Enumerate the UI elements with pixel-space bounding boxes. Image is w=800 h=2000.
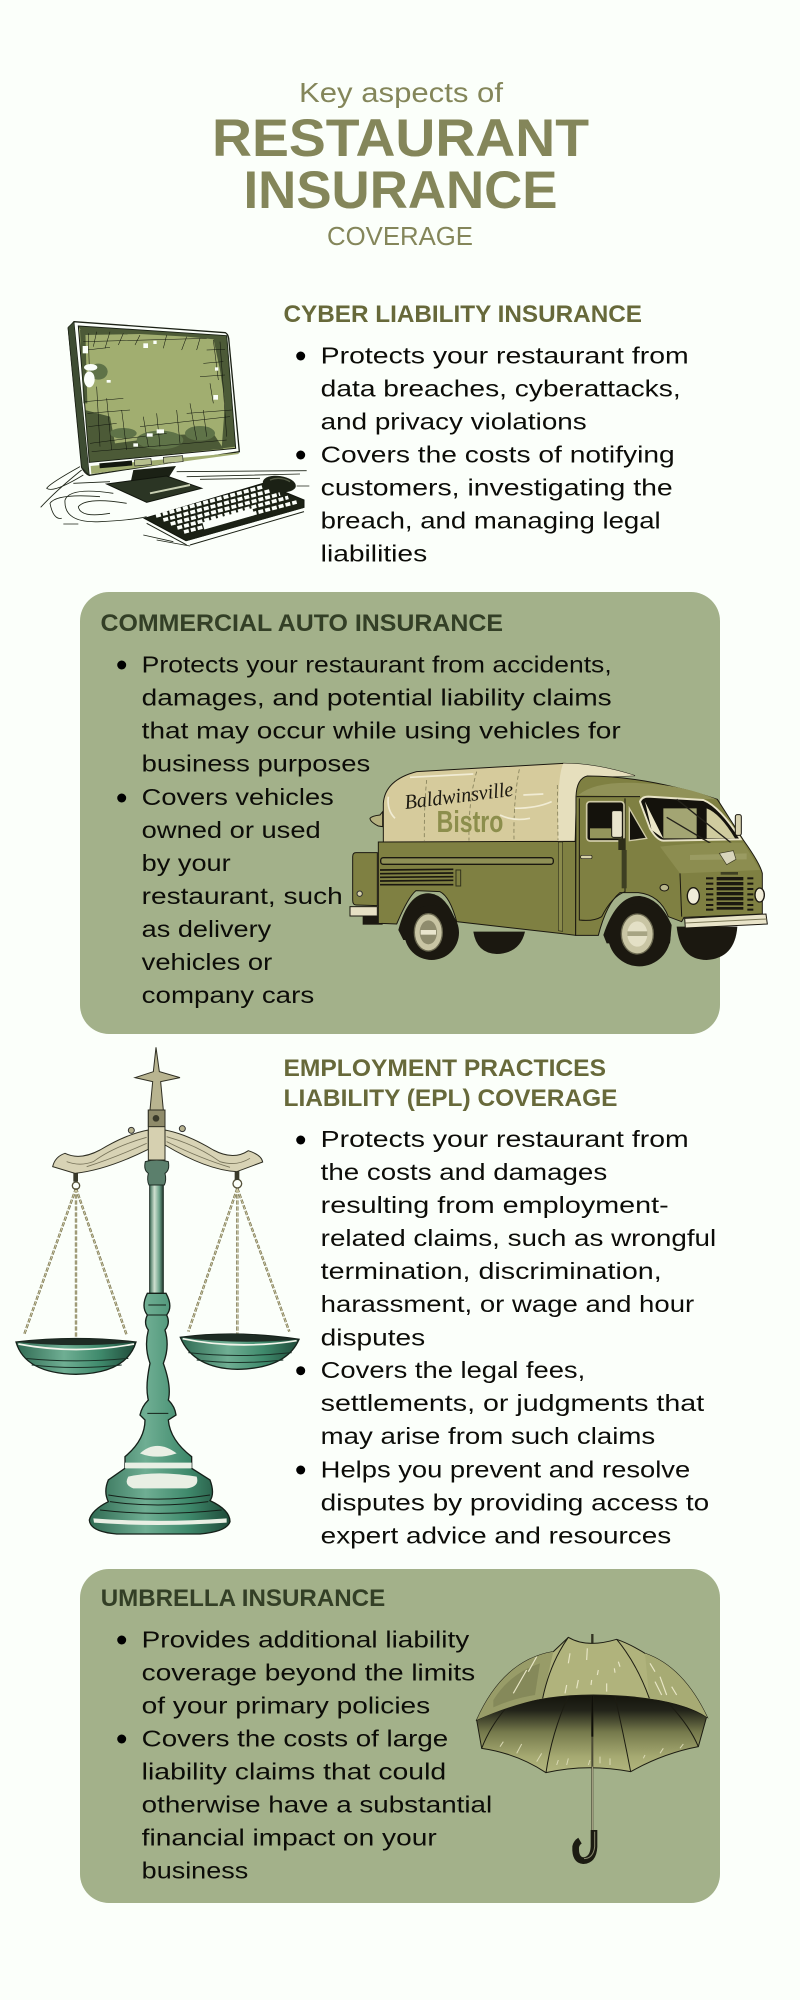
- front bumper: [685, 914, 767, 928]
- screen: [78, 326, 236, 462]
- bullet list: company cars: [142, 982, 314, 1008]
- bullet list: [117, 652, 621, 1008]
- bullet list: [117, 1627, 492, 1884]
- underside highlights: [500, 1742, 683, 1765]
- bullet list: disputes by providing access to: [321, 1490, 709, 1516]
- van lettering: Bistro: [437, 805, 503, 839]
- bullet list: the costs and damages: [321, 1159, 607, 1185]
- turned stem: [89, 1293, 230, 1534]
- bullet list: financial impact on your: [142, 1825, 437, 1851]
- hood and grille: [660, 842, 760, 873]
- column: [150, 1183, 163, 1293]
- bullet list: Protects your restaurant from: [321, 342, 689, 368]
- bullet list: [296, 1126, 716, 1548]
- bullet list: Covers the costs of large: [142, 1726, 448, 1752]
- bullet list: liability claims that could: [142, 1759, 446, 1785]
- bullet list: Covers vehicles: [142, 784, 334, 810]
- bullet list: and privacy violations: [321, 408, 587, 434]
- bullet list: Protects your restaurant from accidents,: [142, 652, 612, 678]
- heading: [284, 1055, 618, 1112]
- door mirror: [612, 811, 622, 837]
- panel: commercial auto insurance: [80, 592, 767, 1034]
- bullet list: by your: [142, 850, 231, 876]
- canopy: [383, 763, 635, 843]
- heading: LIABILITY (EPL) COVERAGE: [284, 1085, 618, 1112]
- title: INSURANCE: [244, 161, 558, 220]
- bullet list: settlements, or judgments that: [321, 1390, 705, 1416]
- section: employment practices liability: [284, 1055, 716, 1548]
- bullet list: restaurant, such: [142, 883, 343, 909]
- cab: [576, 776, 762, 935]
- bullet list: business purposes: [142, 751, 370, 777]
- canopy rain highlights: [513, 1648, 677, 1695]
- panel background: [80, 1569, 720, 1903]
- bullet list: coverage beyond the limits: [142, 1660, 475, 1686]
- bullet list: harassment, or wage and hour: [321, 1291, 695, 1317]
- wheels: [398, 893, 457, 940]
- underside: [477, 1695, 707, 1773]
- bullet list: customers, investigating the: [321, 474, 673, 500]
- title: [212, 77, 589, 251]
- bullet list: Covers the costs of notifying: [321, 442, 675, 468]
- spare box and rear bumper: [353, 853, 377, 906]
- mouse: [262, 474, 297, 494]
- monitor frame: [68, 322, 239, 475]
- handle: [576, 1830, 594, 1861]
- finial: [135, 1047, 180, 1110]
- cab window: [587, 802, 624, 841]
- panel background: [80, 592, 720, 1034]
- bullet list: that may occur while using vehicles for: [142, 718, 621, 744]
- headlights: [687, 888, 699, 904]
- bullet list: Covers the legal fees,: [321, 1357, 585, 1383]
- bullet list: owned or used: [142, 817, 321, 843]
- illustration: computer: [41, 322, 309, 546]
- panel: umbrella insurance: [80, 1569, 720, 1903]
- title: Key aspects of: [299, 77, 503, 108]
- van lettering: [403, 779, 514, 839]
- heading: CYBER LIABILITY INSURANCE: [284, 301, 642, 328]
- bullet list: Protects your restaurant from: [321, 1126, 689, 1152]
- van lettering: Baldwinsville: [403, 779, 514, 814]
- illustration: umbrella: [477, 1634, 707, 1861]
- heading: COMMERCIAL AUTO INSURANCE: [100, 610, 503, 637]
- heading: UMBRELLA INSURANCE: [101, 1585, 385, 1612]
- bullet list: damages, and potential liability claims: [142, 685, 612, 711]
- illustration: delivery van: [350, 763, 767, 966]
- bullet list: liabilities: [321, 540, 427, 566]
- bullet list: [296, 342, 689, 566]
- bullet list: Helps you prevent and resolve: [321, 1456, 690, 1482]
- central block: [148, 1110, 165, 1160]
- bullet list: as delivery: [142, 916, 272, 942]
- canopy top: [477, 1637, 707, 1720]
- cables: [41, 467, 309, 546]
- stem highlights: [93, 1446, 227, 1525]
- bullet list: vehicles or: [142, 949, 273, 975]
- bullet list: business: [142, 1858, 248, 1884]
- title: COVERAGE: [327, 223, 473, 251]
- far wheels: [473, 932, 525, 954]
- illustration: scales of justice: [16, 1047, 299, 1534]
- bullet list: may arise from such claims: [321, 1423, 655, 1449]
- section: cyber liability: [284, 301, 689, 566]
- title: RESTAURANT: [212, 109, 589, 168]
- bullet list: resulting from employment-: [321, 1192, 669, 1218]
- bullet list: otherwise have a substantial: [142, 1792, 492, 1818]
- bullet list: termination, discrimination,: [321, 1258, 662, 1284]
- windshield: [640, 797, 741, 841]
- bullet list: expert advice and resources: [321, 1522, 671, 1548]
- bullet list: of your primary policies: [142, 1693, 430, 1719]
- bullet list: Provides additional liability: [142, 1627, 470, 1653]
- bullet list: related claims, such as wrongful: [321, 1225, 716, 1251]
- cargo body: [378, 841, 576, 935]
- heading: EMPLOYMENT PRACTICES: [284, 1055, 606, 1082]
- bullet list: disputes: [321, 1324, 425, 1350]
- bullet list: breach, and managing legal: [321, 508, 661, 534]
- bullet list: data breaches, cyberattacks,: [321, 376, 681, 402]
- chains: [24, 1188, 289, 1342]
- pans: [16, 1338, 136, 1374]
- keyboard: [144, 483, 304, 541]
- stand: [129, 466, 176, 488]
- beam: [53, 1130, 148, 1173]
- shaft: [589, 1634, 596, 1645]
